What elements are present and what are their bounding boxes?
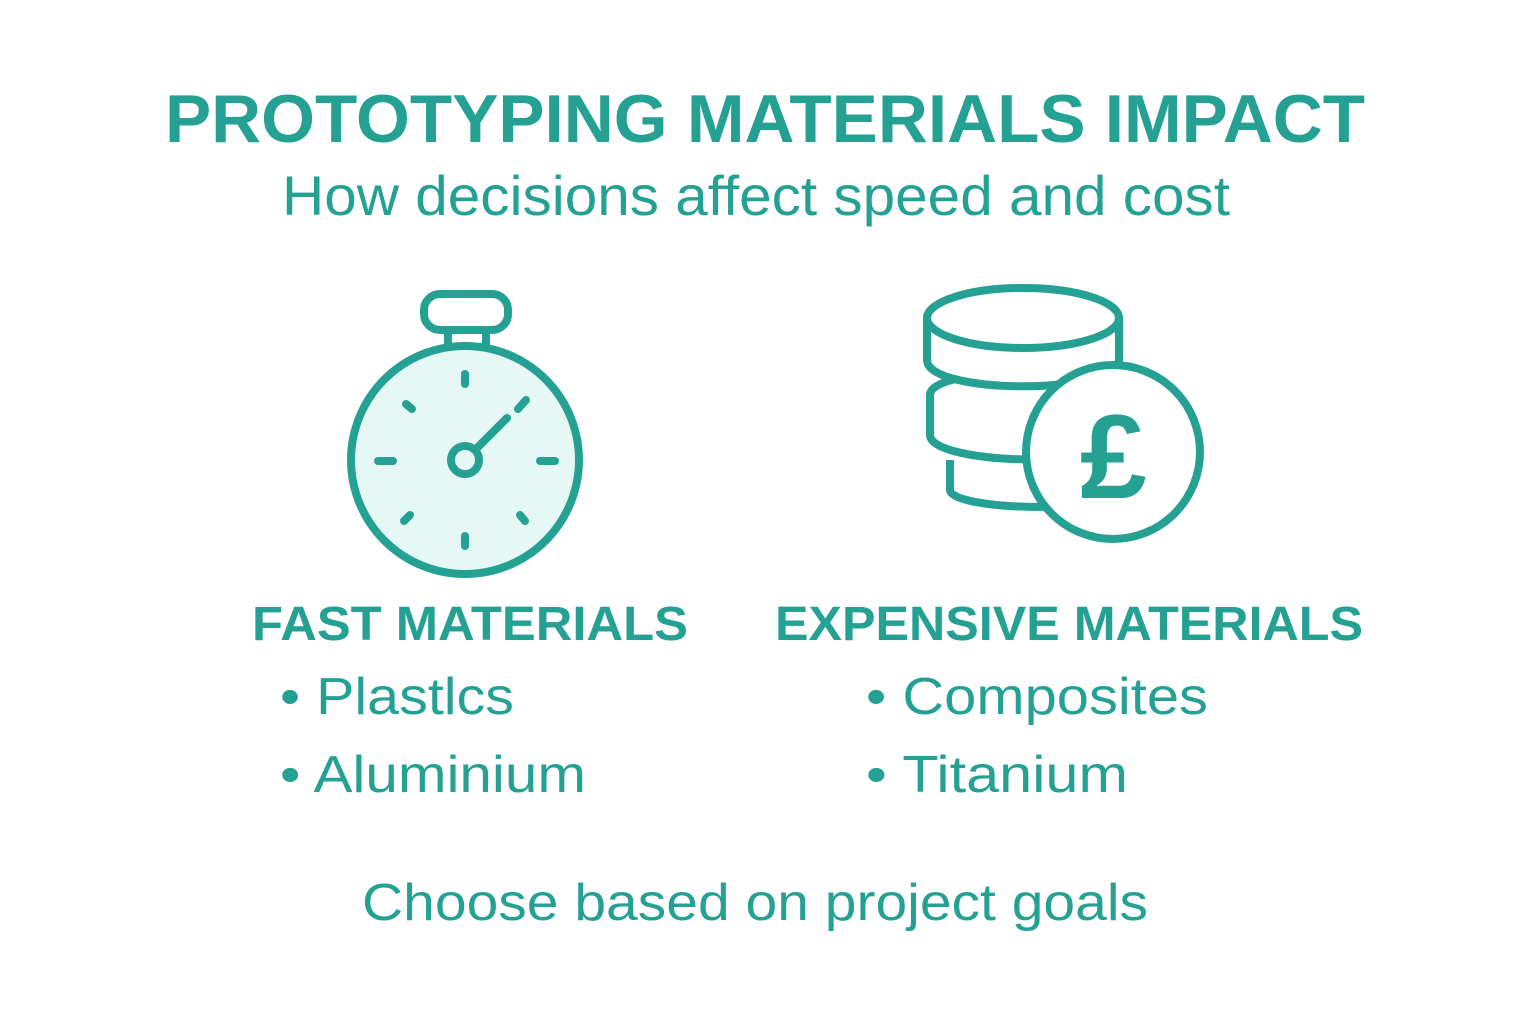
list: fast materials: • Plastlcs (280, 668, 514, 726)
subtitle: How decisions affect speed and cost (282, 164, 1230, 227)
icon: stopwatch (351, 294, 579, 574)
list: fast materials: • Aluminium (280, 746, 586, 804)
list: fast materials (280, 668, 586, 804)
list: expensive materials (866, 668, 1208, 804)
list: expensive materials: • Titanium (866, 746, 1128, 804)
list: expensive materials: • Composites (866, 668, 1208, 726)
heading: fast materials: FAST MATERIALS (252, 598, 688, 651)
title: PROTOTYPING MATERIALS IMPACT (165, 81, 1365, 157)
heading: expensive materials: EXPENSIVE MATERIALS (775, 598, 1363, 651)
footer: Choose based on project goals (362, 874, 1148, 932)
pound symbol: £ (1080, 390, 1147, 524)
icon: coins with pound (927, 288, 1200, 539)
